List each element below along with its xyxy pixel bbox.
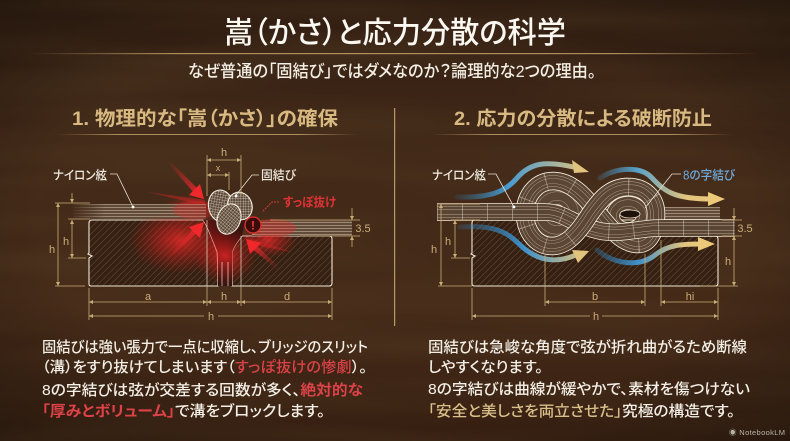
dimensions: b (592, 291, 598, 303)
subtitle: なぜ普通の「固結び」ではダメなのか？論理的な2つの理由。 (188, 61, 596, 81)
dimensions: hi (686, 291, 694, 303)
text block: right: 固結びは急峻な角度で弦が折れ曲がるため断線 (428, 338, 747, 356)
dimensions: d (284, 291, 290, 303)
heading 1: 1. 物理的な「嵩（かさ）」の確保 (72, 108, 339, 130)
text block: right (428, 338, 750, 420)
dimensions: 3.5 (737, 223, 753, 235)
red arrows (166, 160, 280, 270)
main string (437, 212, 735, 232)
nylon string right (252, 220, 352, 236)
text block: left: （溝）をすり抜けてしまいます（ すっぽ抜けの惨劇 ）。 (42, 358, 367, 376)
label: slip-through (262, 194, 336, 212)
text block: left: 固結びは強い張力で一点に収縮し、ブリッジのスリット (42, 338, 368, 356)
diagram: figure-8 knot on bridge (431, 160, 753, 323)
label: nylon string (53, 168, 134, 208)
over strand (572, 187, 628, 237)
dimensions: h (725, 256, 731, 268)
dimensions (49, 147, 371, 323)
warning icon: ! (251, 218, 255, 232)
knot (206, 188, 256, 237)
dimensions: a (145, 291, 152, 303)
nylon string tail (650, 207, 720, 220)
column divider (394, 108, 395, 326)
dimensions: h (221, 291, 227, 303)
figure-8 knot (437, 181, 735, 246)
text block: left: 「厚みとボリューム」 で溝をブロックします。 (42, 402, 325, 420)
label: nylon string: ナイロン絃 (432, 168, 486, 182)
bridge plank (88, 220, 332, 286)
label: nylon string (432, 168, 515, 208)
flow arrows (457, 160, 725, 263)
title: 嵩（かさ）と応力分散の科学 (224, 17, 566, 50)
text block: right: 「安全と美しさを両立させた」 究極の構造です。 (428, 402, 735, 420)
dimensions: x (216, 163, 221, 173)
heading 2: 2. 応力の分散による破断防止 (454, 108, 712, 130)
label: nylon string: ナイロン絃 (53, 168, 107, 182)
panel: right (428, 108, 753, 420)
text block: right: 8の字結びは曲線が緩やかで、素材を傷つけない (428, 380, 750, 398)
dimensions: 3.5 (355, 223, 371, 235)
diagram: overhand knot on bridge (49, 147, 371, 323)
dimensions: h (49, 244, 55, 256)
panel: left (42, 108, 371, 420)
inner rings (540, 196, 643, 230)
text block: left: 8の字結びは弦が交差する回数が多く、 絶対的な (42, 381, 363, 399)
dimensions: h (63, 236, 69, 248)
label: slip-through: すっぽ抜け (283, 194, 336, 210)
warning icon (245, 217, 261, 233)
dimensions: h (445, 236, 451, 248)
watermark: ◉ NotebookLM (729, 428, 785, 437)
dimensions (431, 204, 753, 323)
label: overhand knot: 固結び (261, 168, 297, 182)
text block: left (42, 338, 368, 420)
slit lines (207, 220, 241, 286)
outer loop (525, 181, 656, 246)
dimensions: h (221, 147, 227, 159)
slit funnel (203, 220, 245, 286)
text block: right: しやすくなります。 (428, 359, 543, 376)
dimensions: h (208, 311, 214, 323)
dimensions: h (431, 244, 437, 256)
nylon string left (73, 204, 206, 219)
label: figure-8 knot (645, 168, 736, 208)
dimensions: h (593, 311, 599, 323)
label: overhand knot (235, 168, 297, 197)
bridge plank (471, 220, 718, 286)
hole of right lobe (620, 210, 640, 218)
red glow (128, 192, 298, 284)
label: figure-8 knot: 8の字結び (683, 168, 736, 182)
